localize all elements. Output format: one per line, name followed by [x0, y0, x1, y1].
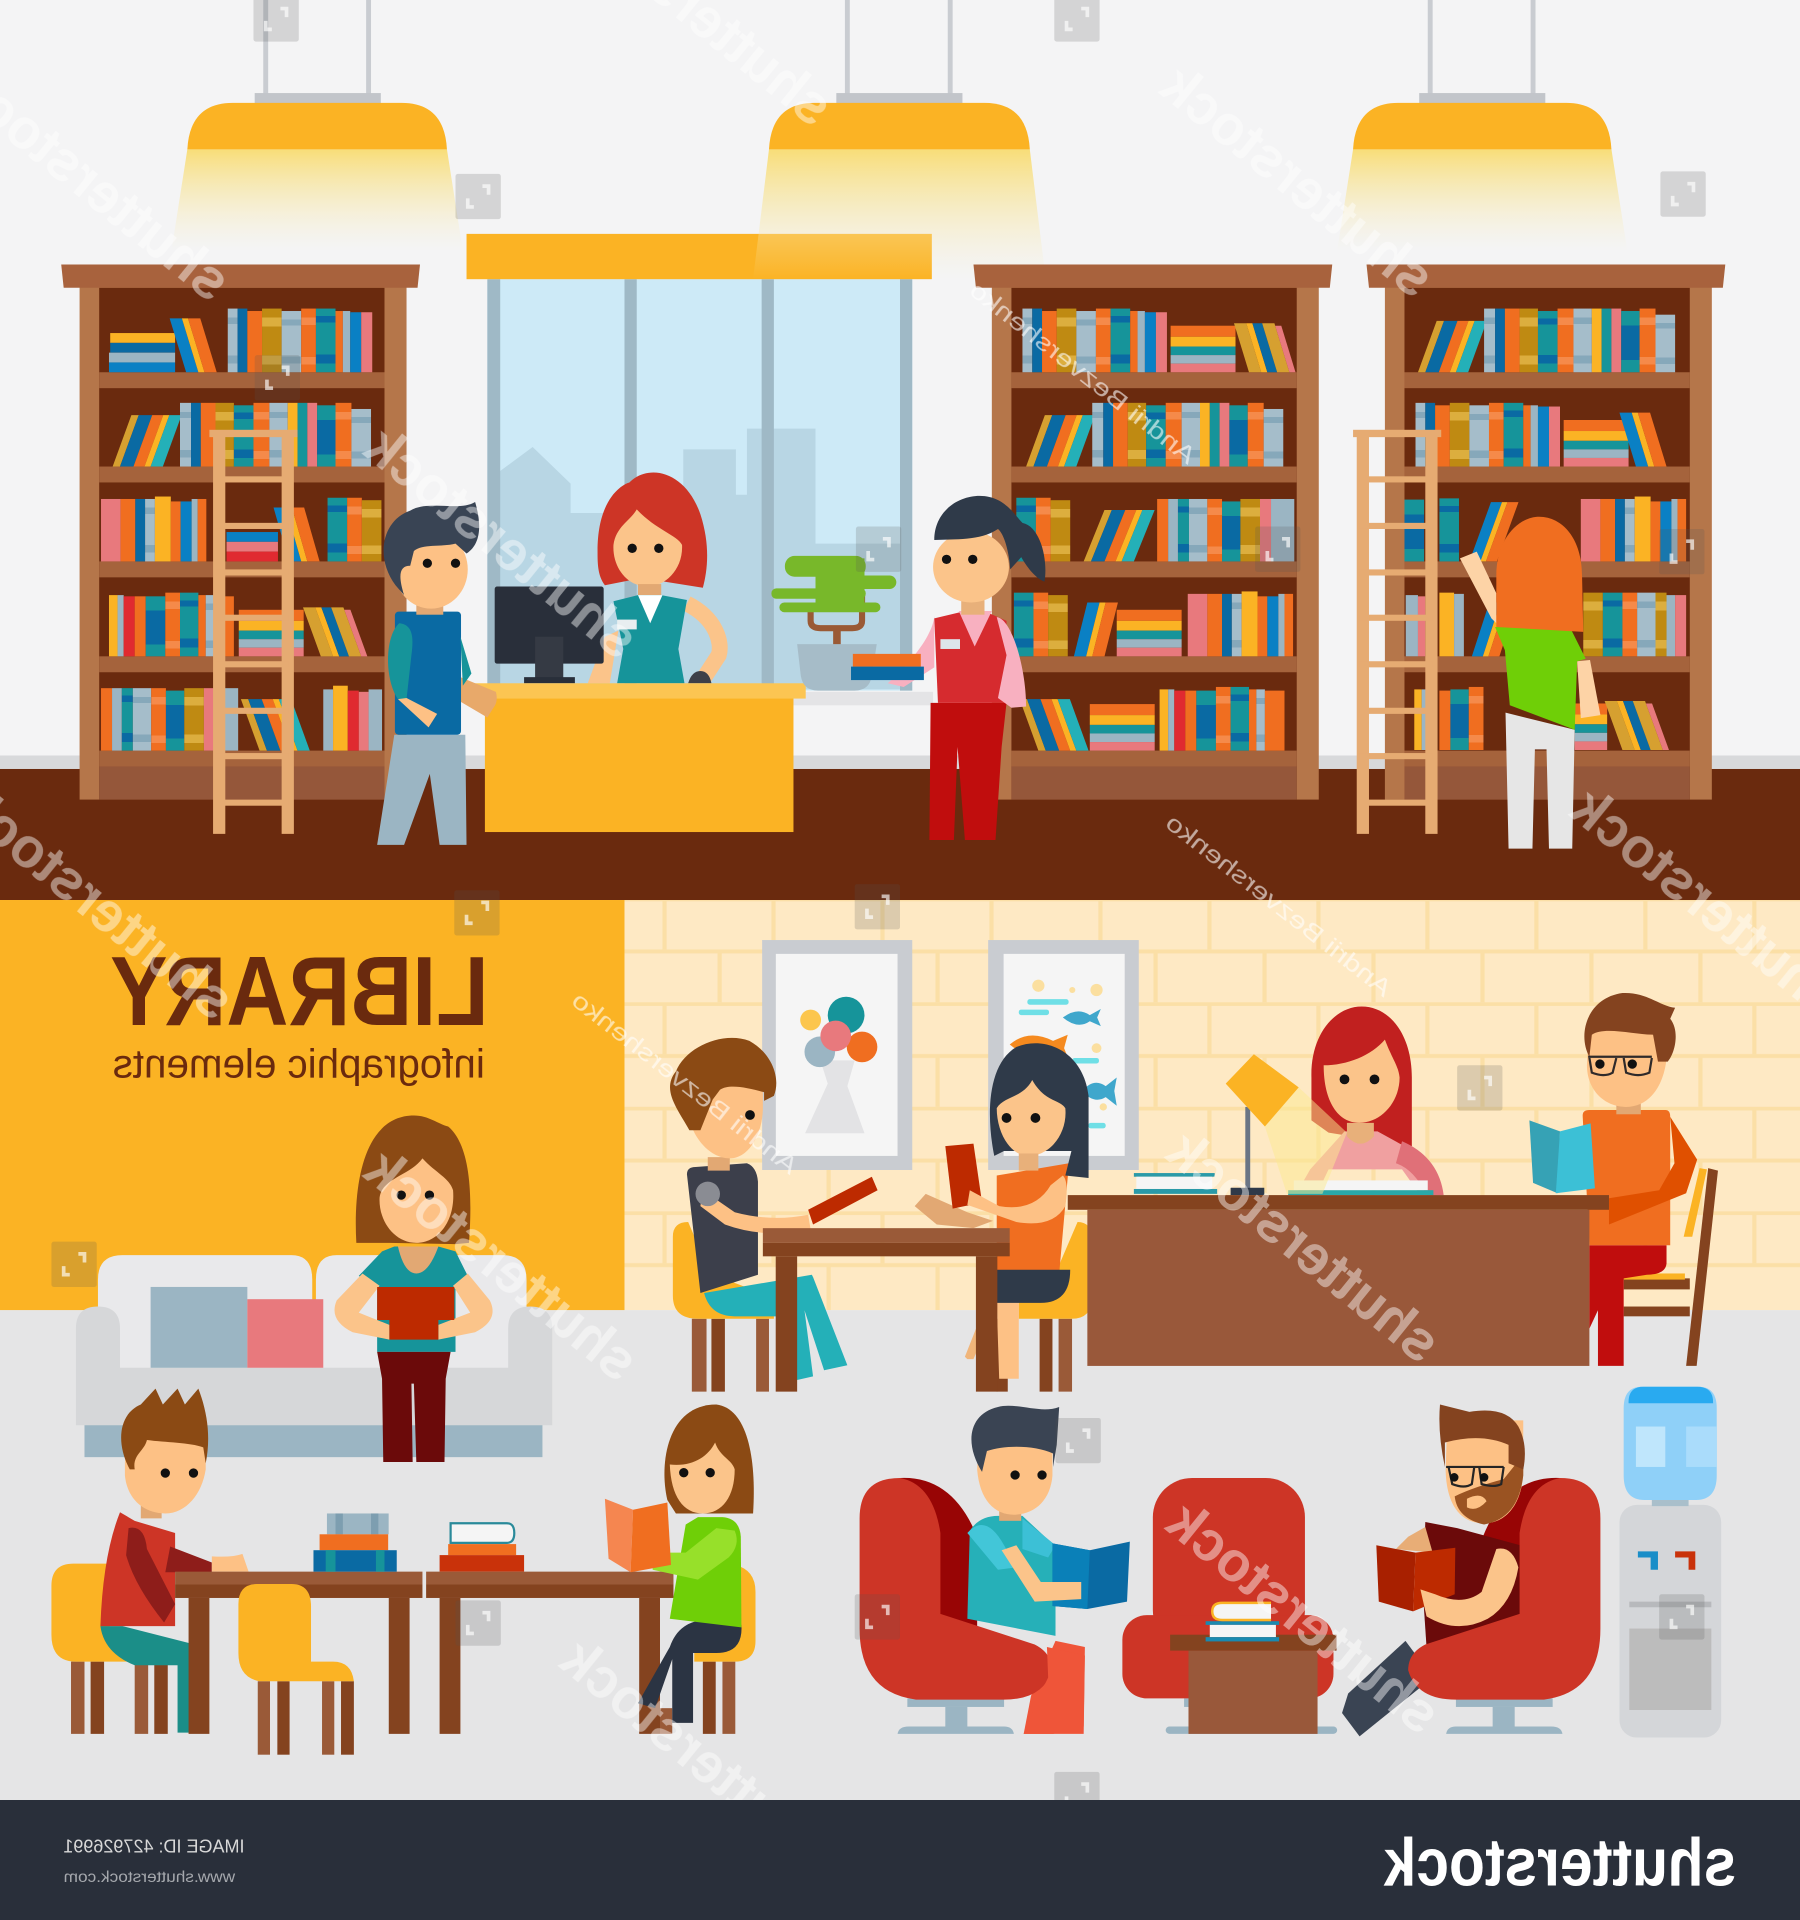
- books held on sill: [851, 654, 924, 680]
- woman with ponytail holding books: [851, 496, 1045, 840]
- subtitle: infographic elements: infographic elements: [113, 1041, 485, 1087]
- open book on desk: [1288, 1180, 1433, 1195]
- brick wall panel: [624, 900, 1800, 1310]
- library floor: [0, 769, 1800, 900]
- ceiling lamp right: [1337, 0, 1627, 251]
- chair right: [997, 1222, 1092, 1392]
- bookcase right: [1367, 264, 1725, 800]
- image id: IMAGE ID: 427926991: [63, 1836, 245, 1857]
- front desk with computer and receptionist: [474, 472, 806, 832]
- desk lamp: [1226, 1054, 1347, 1195]
- shutterstock watermark text: shutterstock: [1149, 52, 1446, 309]
- armchair group: [860, 1404, 1600, 1736]
- computer mouse: [688, 671, 711, 683]
- shutterstock watermark text: shutterstock: [1155, 1117, 1453, 1375]
- book stack left table: [313, 1513, 397, 1572]
- chair left: [673, 1222, 774, 1392]
- small table with boy and girl: [670, 1038, 1092, 1392]
- girl reading: [915, 1043, 1089, 1379]
- baseboard: [0, 756, 1800, 769]
- armchair centre: [1122, 1478, 1337, 1734]
- reception desk: [474, 683, 806, 832]
- shutterstock watermark text: shutterstock: [549, 1625, 846, 1883]
- photographer watermark text: Andrii Bezvershenko: [964, 277, 1201, 470]
- right table: [426, 1572, 673, 1734]
- armchair right with bearded man: [1342, 1404, 1600, 1736]
- library wall background: [0, 0, 1800, 769]
- yellow window header: [467, 234, 932, 279]
- ladder right: [1353, 430, 1441, 834]
- photographer watermark text: Andrii Bezvershenko: [1160, 810, 1397, 1003]
- bonsai plant: [771, 556, 896, 691]
- shutterstock watermark text: shutterstock: [353, 413, 650, 671]
- picture: fish: [988, 940, 1139, 1170]
- yellow title panel: [0, 900, 624, 1310]
- shutterstock watermark text: shutterstock: [1155, 1488, 1453, 1746]
- chair in front of table: [238, 1584, 354, 1755]
- footer logo: shutterstock: [1383, 1826, 1736, 1901]
- side table with books: [1170, 1603, 1337, 1734]
- long desk with reading woman and man: [1068, 993, 1718, 1366]
- chair right of table: [694, 1565, 756, 1734]
- window with city view: [487, 279, 933, 705]
- man at reception desk: [377, 502, 497, 845]
- bookcase left: [61, 264, 420, 800]
- woman reading on sofa: [335, 1116, 493, 1462]
- water cooler: [1620, 1387, 1721, 1738]
- bearded man reading: [1342, 1404, 1525, 1736]
- left table: [175, 1572, 422, 1734]
- books on desk: [1134, 1173, 1217, 1194]
- ceiling lamp centre: [753, 0, 1046, 279]
- woman reaching for a book: [1460, 517, 1600, 849]
- book stack right table: [440, 1523, 524, 1572]
- bookcase middle: [973, 264, 1332, 800]
- man with glasses: [1529, 993, 1697, 1366]
- ladder left: [209, 430, 298, 834]
- computer monitor: [495, 587, 604, 683]
- photographer watermark text: Andrii Bezvershenko: [566, 987, 803, 1180]
- shutterstock watermark text: shutterstock: [353, 1136, 650, 1393]
- chair with yellow seat: [1624, 1168, 1718, 1366]
- picture: balloon vase: [762, 940, 912, 1170]
- chair behind boy: [51, 1564, 168, 1734]
- website: www.shutterstock.com: [64, 1869, 236, 1886]
- footer bar: [0, 1800, 1800, 1920]
- receptionist: [588, 472, 720, 683]
- ceiling lamp left: [171, 0, 463, 251]
- desk: [1068, 1195, 1609, 1366]
- sofa: [76, 1255, 552, 1457]
- title: LIBRARY: LIBRARY: [110, 936, 489, 1046]
- man in blue book reader: [967, 1406, 1130, 1734]
- boy reading: [670, 1038, 878, 1380]
- left study tables group: [51, 1389, 756, 1755]
- red-haired woman at desk: [1296, 1007, 1444, 1195]
- table: [763, 1228, 1010, 1392]
- boy at table: [100, 1389, 249, 1733]
- reading room floor: [0, 1310, 1800, 1800]
- armchair left with reading man: [860, 1406, 1130, 1734]
- girl with orange book: [605, 1404, 754, 1723]
- photographer watermark text: [566, 277, 1397, 1180]
